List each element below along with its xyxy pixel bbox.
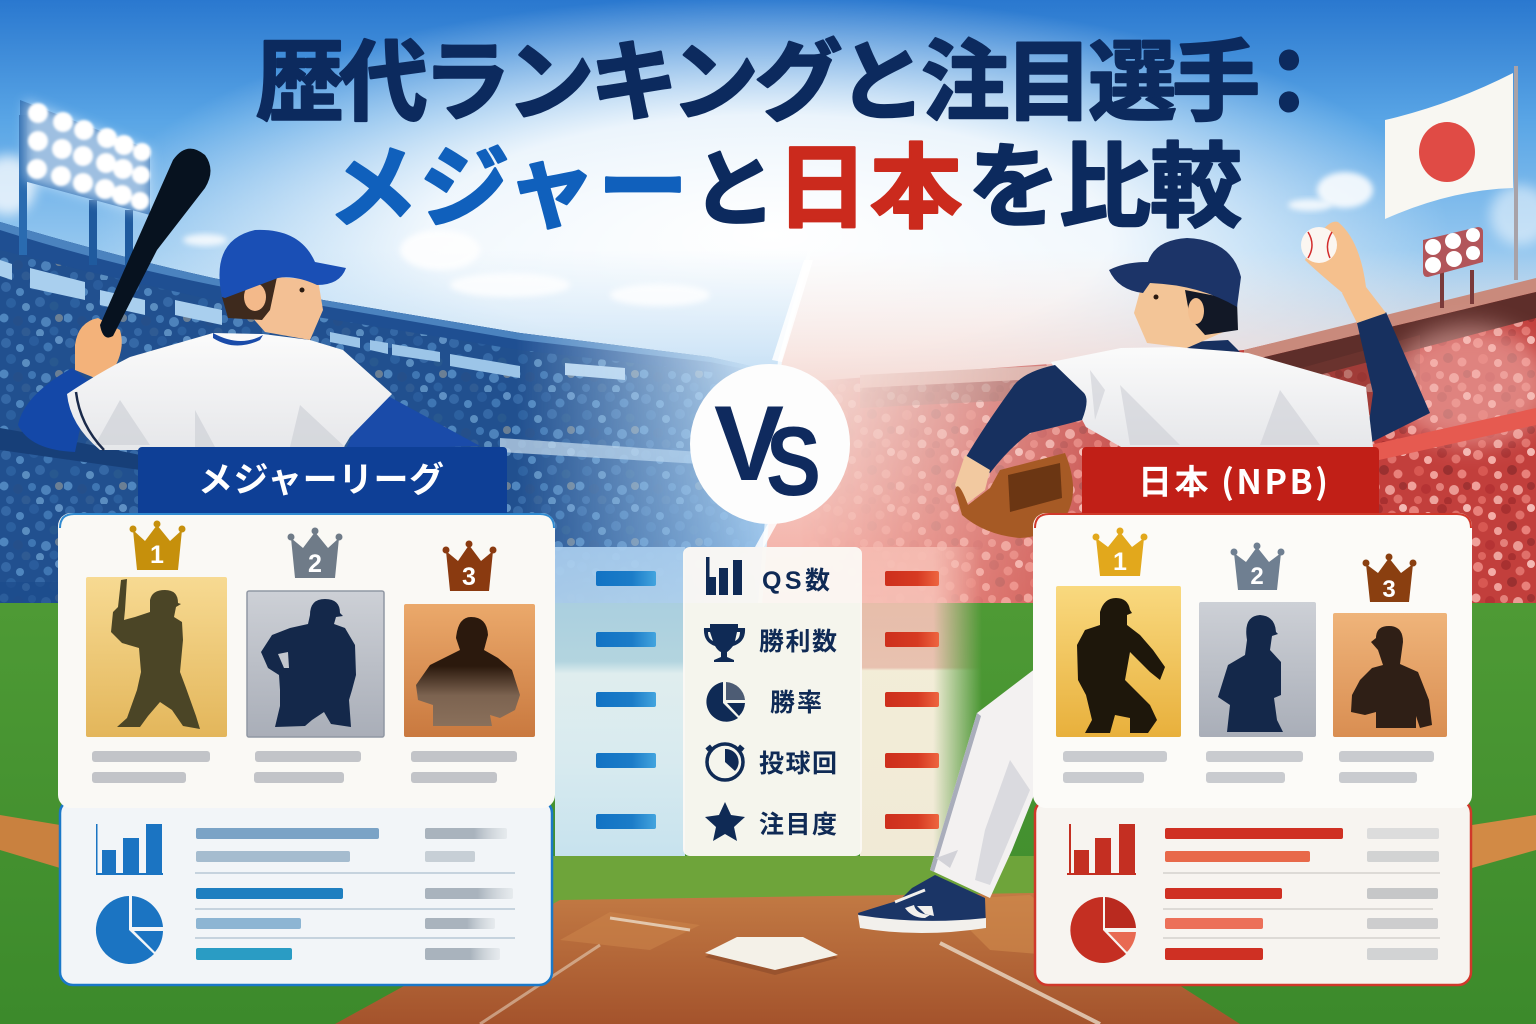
rank 3 photo <box>404 604 535 737</box>
rank 2 crown: 2 <box>308 550 322 578</box>
pitcher jersey <box>1051 347 1373 447</box>
pie chart icon <box>96 896 163 964</box>
right strip <box>860 547 982 856</box>
icon: trophy <box>704 624 745 662</box>
ranking panel upper <box>58 513 555 808</box>
pie chart icon <box>1070 897 1136 963</box>
stats panel lower <box>60 800 552 985</box>
title line 1: 歴代ランキングと注目選手 <box>256 12 1260 139</box>
pitcher legs and shoe <box>858 665 1040 933</box>
left strip <box>555 547 685 856</box>
batter right sleeve <box>345 396 480 450</box>
title: major: メジャー <box>328 115 688 245</box>
rank 1 photo <box>1056 586 1181 737</box>
rank 1 crown <box>1092 528 1148 576</box>
rank 1 crown: 1 <box>1113 548 1127 576</box>
ranking panel upper <box>1033 513 1472 808</box>
label: wins: 勝利数 <box>759 628 837 656</box>
panel: major league <box>58 447 555 985</box>
rank 3 crown: 3 <box>1382 576 1396 603</box>
pitcher left arm <box>966 365 1087 473</box>
icon: stopwatch <box>705 744 745 780</box>
NPB banner <box>1082 447 1379 517</box>
batter jersey <box>67 333 392 450</box>
bar chart icon <box>1067 824 1136 875</box>
rank 3 crown <box>442 540 496 591</box>
pitcher right arm <box>1357 312 1430 445</box>
icon: bar chart <box>706 557 742 595</box>
metric bars <box>1163 828 1440 960</box>
icon: pie chart <box>706 682 745 722</box>
pitcher hand and ball <box>1305 222 1366 295</box>
light tower left <box>19 100 151 270</box>
title <box>256 0 1307 247</box>
home plate <box>705 937 838 975</box>
right stadium stands <box>828 278 1536 603</box>
rank 2 crown <box>1230 542 1284 590</box>
player text placeholders <box>1063 751 1434 783</box>
rank 1 crown <box>130 520 186 570</box>
batter head <box>250 277 323 340</box>
metric bars <box>195 828 515 960</box>
batter hand <box>75 318 122 378</box>
player text placeholders <box>92 751 517 783</box>
batter bat <box>100 149 210 338</box>
label: win rate: 勝率 <box>770 689 822 717</box>
rank 2 crown: 2 <box>1250 563 1264 590</box>
rank 2 photo <box>247 591 384 737</box>
title: japan: 日本 <box>776 114 962 247</box>
bar chart icon <box>96 824 163 875</box>
rank 1 crown: 1 <box>150 541 164 569</box>
pitcher cap <box>1109 238 1241 307</box>
letter S: S <box>766 406 821 516</box>
stats panel lower <box>1035 800 1471 985</box>
major league banner: メジャーリーグ <box>198 452 444 503</box>
rank 2 photo <box>1199 602 1316 737</box>
baseball field <box>0 603 1536 1024</box>
red dashes <box>885 571 939 829</box>
major league banner <box>138 447 507 517</box>
center metric card <box>683 547 862 856</box>
label: innings: 投球回 <box>759 750 837 778</box>
pitcher head <box>1134 280 1235 348</box>
rank 2 crown <box>288 528 342 578</box>
batter player <box>18 149 480 452</box>
title: to: と <box>692 123 776 244</box>
left stadium stands <box>0 222 745 603</box>
versus badge <box>690 364 850 524</box>
batter cap <box>219 230 346 298</box>
label: attention: 注目度 <box>759 811 837 839</box>
rank 3 photo <box>1333 613 1447 737</box>
pitcher hand in glove <box>955 455 990 505</box>
japanese flag <box>1385 66 1518 280</box>
title: compare: を比較 <box>968 113 1242 246</box>
icon: star <box>705 802 745 841</box>
central comparison table <box>555 547 982 856</box>
pitcher glove <box>955 453 1073 538</box>
label: QS: QS数 <box>762 567 830 595</box>
letter V: V <box>714 383 784 503</box>
rank 3 crown: 3 <box>462 563 476 591</box>
batter left sleeve <box>18 368 90 452</box>
rank 3 crown <box>1362 554 1416 603</box>
rank 1 photo <box>86 577 227 737</box>
panel: japan NPB <box>1033 447 1472 985</box>
NPB banner: 日本 (NPB) <box>1138 455 1328 504</box>
pitcher player upper body <box>955 222 1430 538</box>
light tower right <box>1423 227 1483 308</box>
blue dashes <box>596 571 656 829</box>
